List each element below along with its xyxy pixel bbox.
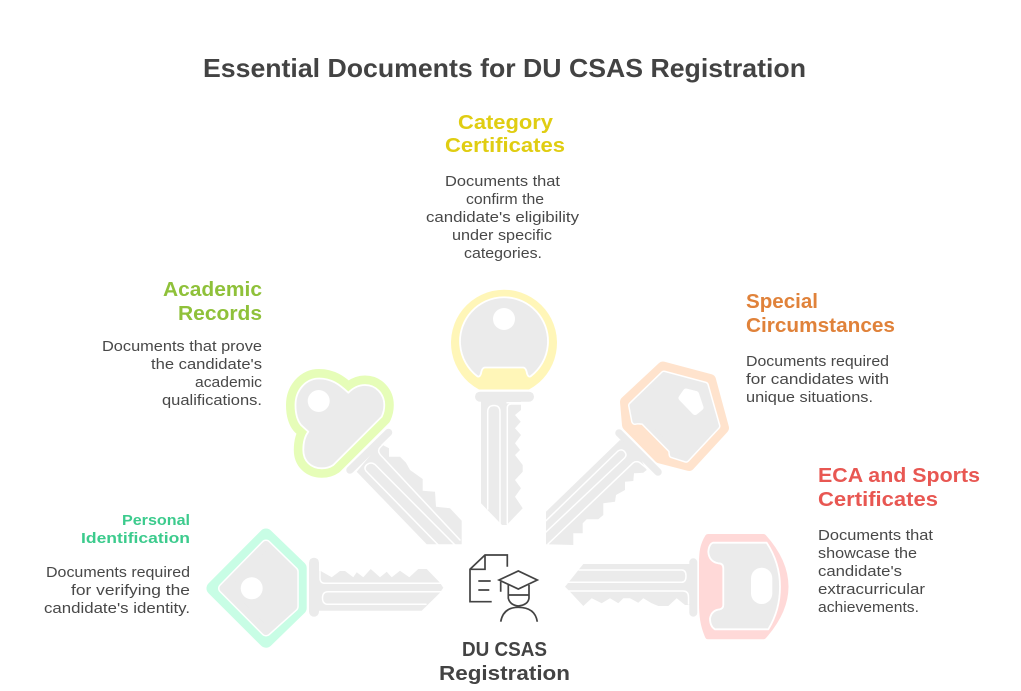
text: category description [426, 174, 580, 262]
key: personal identification [214, 536, 444, 641]
panel: category certificates text [426, 112, 580, 262]
key head body [296, 378, 384, 468]
key blade [319, 569, 443, 611]
key hole [493, 308, 515, 330]
heading: eca and sports certificates [818, 465, 980, 511]
text: eca description: candidate's [818, 564, 902, 580]
text: category description: categories. [464, 246, 542, 262]
key blade [546, 440, 647, 545]
key head outline [626, 368, 723, 465]
key blade [481, 401, 523, 525]
key: category certificates [451, 290, 557, 525]
text: category description: confirm the [466, 192, 544, 208]
panel: personal identification text [44, 512, 190, 617]
key: special circumstances [546, 368, 723, 545]
text: eca description: showcase the [818, 546, 917, 562]
text: personal description: Documents required [46, 565, 190, 581]
panel: special circumstances text [746, 291, 895, 406]
text: special description [746, 354, 889, 406]
key shoulder [619, 433, 658, 472]
icon: graduation cap [499, 571, 537, 592]
key shoulder [309, 558, 319, 617]
key head outline [296, 378, 384, 468]
text: special description: for candidates with [746, 372, 889, 388]
heading: personal identification [81, 512, 190, 547]
text: category description: Documents that [445, 174, 560, 190]
text: eca description: achievements. [818, 600, 919, 616]
text: personal description: candidate's identity. [44, 601, 190, 617]
text: academic description: Documents that prove [102, 339, 262, 355]
text: academic description: the candidate's [151, 357, 262, 373]
text: academic description: academic [195, 375, 262, 391]
heading: academic records [163, 279, 262, 325]
heading: eca and sports certificates: Certificates [818, 489, 938, 511]
text: academic description [102, 339, 262, 409]
heading: special circumstances [746, 291, 895, 337]
key blade [565, 564, 690, 606]
label: du csas registration [439, 639, 570, 685]
key: eca and sports certificates [565, 537, 786, 636]
icon: document [470, 555, 507, 602]
text: special description: Documents required [746, 354, 889, 370]
text: eca description: extracurricular [818, 582, 925, 598]
label: du csas registration: DU CSAS [462, 639, 547, 661]
label: du csas registration: Registration [439, 663, 570, 685]
heading: category certificates: Category [458, 112, 554, 134]
key head outline [214, 536, 300, 641]
heading: academic records: Records [178, 303, 262, 325]
text: personal description: for verifying the [71, 583, 190, 599]
key head outline [702, 537, 786, 636]
panel: eca and sports text [818, 465, 980, 616]
icon: center document and graduate [470, 555, 537, 622]
key hole [308, 390, 330, 412]
heading: category certificates: Certificates [445, 135, 565, 157]
icon: graduate head [508, 585, 529, 606]
text: eca description [818, 528, 933, 616]
key: academic records [296, 378, 462, 545]
icon: graduate shoulders [501, 607, 537, 622]
text: academic description: qualifications. [162, 393, 262, 409]
key hole [241, 577, 263, 599]
heading: special circumstances: Circumstances [746, 315, 895, 337]
title: Essential Documents for DU CSAS Registration [203, 53, 806, 83]
heading: personal identification: Identification [81, 530, 190, 547]
key shoulder [350, 432, 388, 470]
text: special description: unique situations. [746, 390, 873, 406]
heading: personal identification: Personal [122, 512, 190, 529]
text: eca description: Documents that [818, 528, 933, 544]
heading: eca and sports certificates: ECA and Sports [818, 465, 980, 487]
key blade [357, 445, 462, 544]
heading: academic records: Academic [163, 279, 262, 301]
key head ring [224, 545, 293, 631]
panel: academic records text [102, 279, 262, 409]
key head ring [632, 374, 716, 459]
key hole [751, 568, 772, 604]
key head body [632, 374, 716, 459]
text: category description: candidate's eligibility [426, 210, 580, 226]
key shoulder [689, 558, 697, 617]
key hole [682, 392, 700, 412]
heading: special circumstances: Special [746, 291, 818, 313]
key head body [460, 297, 548, 377]
heading: category certificates [445, 112, 565, 157]
key shoulder [475, 392, 534, 402]
key head outline [451, 290, 557, 390]
key head body [708, 543, 780, 629]
text: category description: under specific [452, 228, 552, 244]
key head body [224, 545, 293, 631]
text: personal description [44, 565, 190, 617]
